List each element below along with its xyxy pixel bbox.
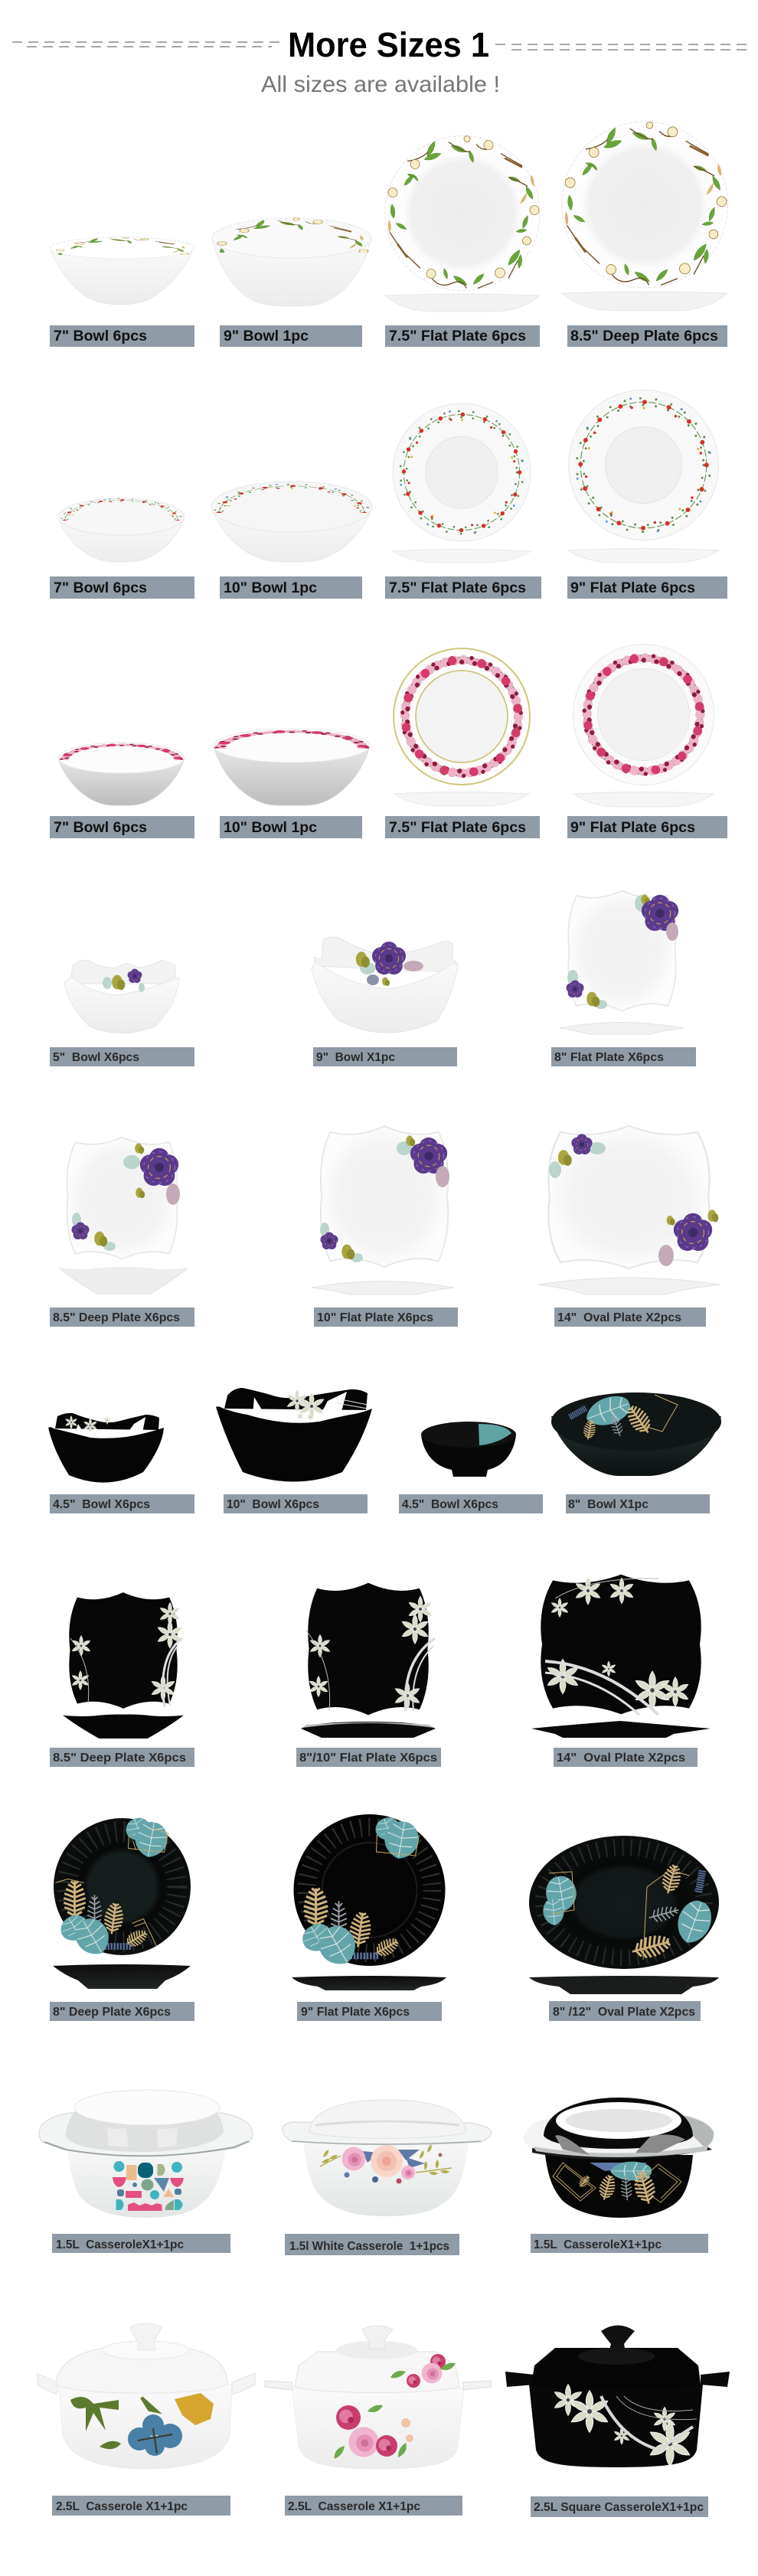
label: 4.5" Bowl X6pcs xyxy=(402,1498,498,1511)
label: 1.5l White Casserole 1+1pcs xyxy=(289,2240,449,2253)
label xyxy=(220,576,362,599)
row 1: green vine flat plate xyxy=(385,136,540,291)
row 10: white square casserole with pink roses xyxy=(265,2326,491,2469)
row 1: green vine bowl 7 inch xyxy=(50,237,194,305)
row 2: flat plate large side view xyxy=(568,548,719,563)
label xyxy=(554,1308,706,1327)
title: More Sizes 1 xyxy=(288,25,489,64)
row 7: black lily deep plate xyxy=(69,1592,184,1709)
row 3: rose bowl 7 inch xyxy=(58,743,185,805)
row 5: oval plate side view xyxy=(538,1278,720,1295)
label xyxy=(567,816,727,838)
row 5: flat plate side view xyxy=(312,1281,454,1295)
row 3: flat plate side view xyxy=(394,792,529,806)
label xyxy=(567,576,727,599)
row 2: red floral flat plate large xyxy=(568,390,718,540)
row 6: black round bowl 4.5 inch xyxy=(421,1422,516,1477)
row 6 labels: 4.5" Bowl X6pcs xyxy=(53,1498,150,1511)
row 8: deep plate side view xyxy=(53,1964,191,1989)
label: 9" Bowl X1pc xyxy=(316,1051,395,1064)
row 9: glass-lid white casserole with roses xyxy=(283,2100,492,2216)
row 9: glass-lid black casserole xyxy=(524,2098,714,2218)
label: 1.5L CasseroleX1+1pc xyxy=(534,2238,662,2251)
label: 9" Flat Plate 6pcs xyxy=(570,580,695,596)
label xyxy=(385,325,540,347)
row 3: rose bowl 10 inch xyxy=(214,729,370,805)
label xyxy=(531,2234,708,2253)
row 5 labels: 8.5" Deep Plate X6pcs xyxy=(53,1311,180,1324)
row 9: glass-lid casserole with mosaic xyxy=(39,2090,253,2218)
row 7: black lily oval plate xyxy=(541,1575,701,1715)
row 5: purple flower oval plate xyxy=(548,1126,718,1268)
row 7 labels xyxy=(50,1748,194,1767)
row 3 labels xyxy=(50,816,194,838)
label: 10" Flat Plate X6pcs xyxy=(317,1311,433,1324)
row 1: green vine bowl 9 inch xyxy=(212,218,371,306)
row 3 labels: 7" Bowl 6pcs xyxy=(54,819,147,836)
row 2: flat plate side view xyxy=(393,550,531,563)
row 1: flat plate side view xyxy=(385,294,540,312)
row 3: rose flat plate xyxy=(573,645,714,785)
row 1: deep plate side view xyxy=(562,292,727,311)
row 7: deep plate side view xyxy=(63,1715,184,1739)
row 6: black crown bowl 10 inch xyxy=(216,1388,372,1482)
header dashed divider left xyxy=(12,42,283,47)
label xyxy=(399,1494,543,1513)
label: 8" Bowl X1pc xyxy=(568,1498,649,1511)
row 4: purple flower flat square plate xyxy=(566,890,678,1011)
label: 2.5L Casserole X1+1pc xyxy=(288,2500,420,2513)
row 8 labels: 8" Deep Plate X6pcs xyxy=(53,2006,171,2019)
label: 8" /12" Oval Plate X2pcs xyxy=(553,2006,695,2019)
label xyxy=(551,1047,696,1066)
label xyxy=(549,2001,701,2021)
row 8: tropical oval plate xyxy=(529,1836,719,1969)
row 6 labels xyxy=(50,1494,194,1513)
row 10: black square casserole with lilies xyxy=(505,2326,730,2467)
label: 2.5L Square CasseroleX1+1pc xyxy=(534,2501,704,2514)
row 5: deep plate side view xyxy=(60,1268,188,1295)
row 1: green vine deep plate xyxy=(562,122,727,288)
label xyxy=(297,2002,442,2021)
row 2: red floral bowl 10 inch xyxy=(211,482,372,562)
label: 14" Oval Plate X2pcs xyxy=(557,1752,685,1765)
row 3: flat plate side view xyxy=(573,792,714,807)
row 4 labels xyxy=(50,1047,194,1066)
row 7: flat plate side view xyxy=(301,1722,436,1738)
label: 7.5" Flat Plate 6pcs xyxy=(389,580,526,596)
label xyxy=(285,2496,462,2516)
row 5 labels xyxy=(50,1308,194,1327)
label: 8"/10" Flat Plate X6pcs xyxy=(299,1752,437,1765)
label: 9" Bowl 1pc xyxy=(224,328,309,344)
label: 9" Flat Plate X6pcs xyxy=(301,2006,410,2019)
row 4: purple flower crown bowl 9 inch xyxy=(312,937,458,1033)
label xyxy=(314,1308,458,1327)
row 8: tropical deep plate xyxy=(54,1814,191,1961)
label: 8" Flat Plate X6pcs xyxy=(554,1051,664,1064)
row 2 labels: 7" Bowl 6pcs xyxy=(54,580,147,596)
label xyxy=(313,1047,457,1066)
row 8: flat plate side view xyxy=(292,1976,446,1990)
row 1 labels xyxy=(50,325,194,347)
label: 10" Bowl X6pcs xyxy=(227,1498,319,1511)
label: 9" Flat Plate 6pcs xyxy=(570,819,695,836)
row 1 labels: 7" Bowl 6pcs xyxy=(54,328,147,344)
row 5: purple flower deep plate xyxy=(67,1137,180,1259)
row 5: purple flower flat plate xyxy=(320,1126,449,1267)
row 6: black tropical bowl 8 inch xyxy=(551,1391,721,1476)
label xyxy=(296,1748,441,1767)
label: 7.5" Flat Plate 6pcs xyxy=(389,328,526,344)
label xyxy=(554,1748,698,1767)
label: 10" Bowl 1pc xyxy=(224,580,317,596)
row 4: purple flower crown bowl 5 inch xyxy=(64,960,179,1033)
label xyxy=(285,2234,459,2255)
row 9 labels: 1.5L CasseroleX1+1pc xyxy=(56,2238,184,2251)
row 8: oval plate side view xyxy=(529,1976,719,1994)
row 4 labels: 5" Bowl X6pcs xyxy=(53,1051,139,1064)
row 6: black crown bowl 4.5 inch xyxy=(48,1413,164,1483)
row 7: black lily flat plate xyxy=(306,1583,435,1715)
row 2 labels xyxy=(50,576,194,599)
label: 10" Bowl 1pc xyxy=(224,819,317,836)
label xyxy=(220,816,362,838)
row 4: square plate side view xyxy=(560,1023,684,1034)
row 8 labels xyxy=(50,2002,194,2021)
label xyxy=(220,325,362,347)
subtitle: All sizes are available ! xyxy=(261,72,500,97)
row 10 labels: 2.5L Casserole X1+1pc xyxy=(56,2500,188,2513)
label xyxy=(531,2496,708,2517)
row 7 labels: 8.5" Deep Plate X6pcs xyxy=(53,1752,186,1765)
label xyxy=(385,816,540,838)
row 7: oval plate side view xyxy=(531,1721,711,1738)
row 8: tropical flat plate xyxy=(294,1814,446,1972)
row 10: white casserole with blue flower xyxy=(38,2323,255,2469)
row 9 labels xyxy=(52,2234,230,2253)
label: 8.5" Deep Plate 6pcs xyxy=(570,328,718,344)
row 3: rose gold-rim flat plate xyxy=(394,648,530,785)
label: 14" Oval Plate X2pcs xyxy=(557,1311,681,1324)
label: 7.5" Flat Plate 6pcs xyxy=(389,819,526,836)
label xyxy=(224,1494,368,1513)
row 2: red floral bowl 7 inch xyxy=(58,498,185,562)
label xyxy=(385,576,541,599)
row 2: red floral flat plate xyxy=(393,403,531,541)
row 10 labels xyxy=(52,2496,230,2516)
label xyxy=(566,1494,710,1513)
header dashed divider right xyxy=(495,44,752,50)
